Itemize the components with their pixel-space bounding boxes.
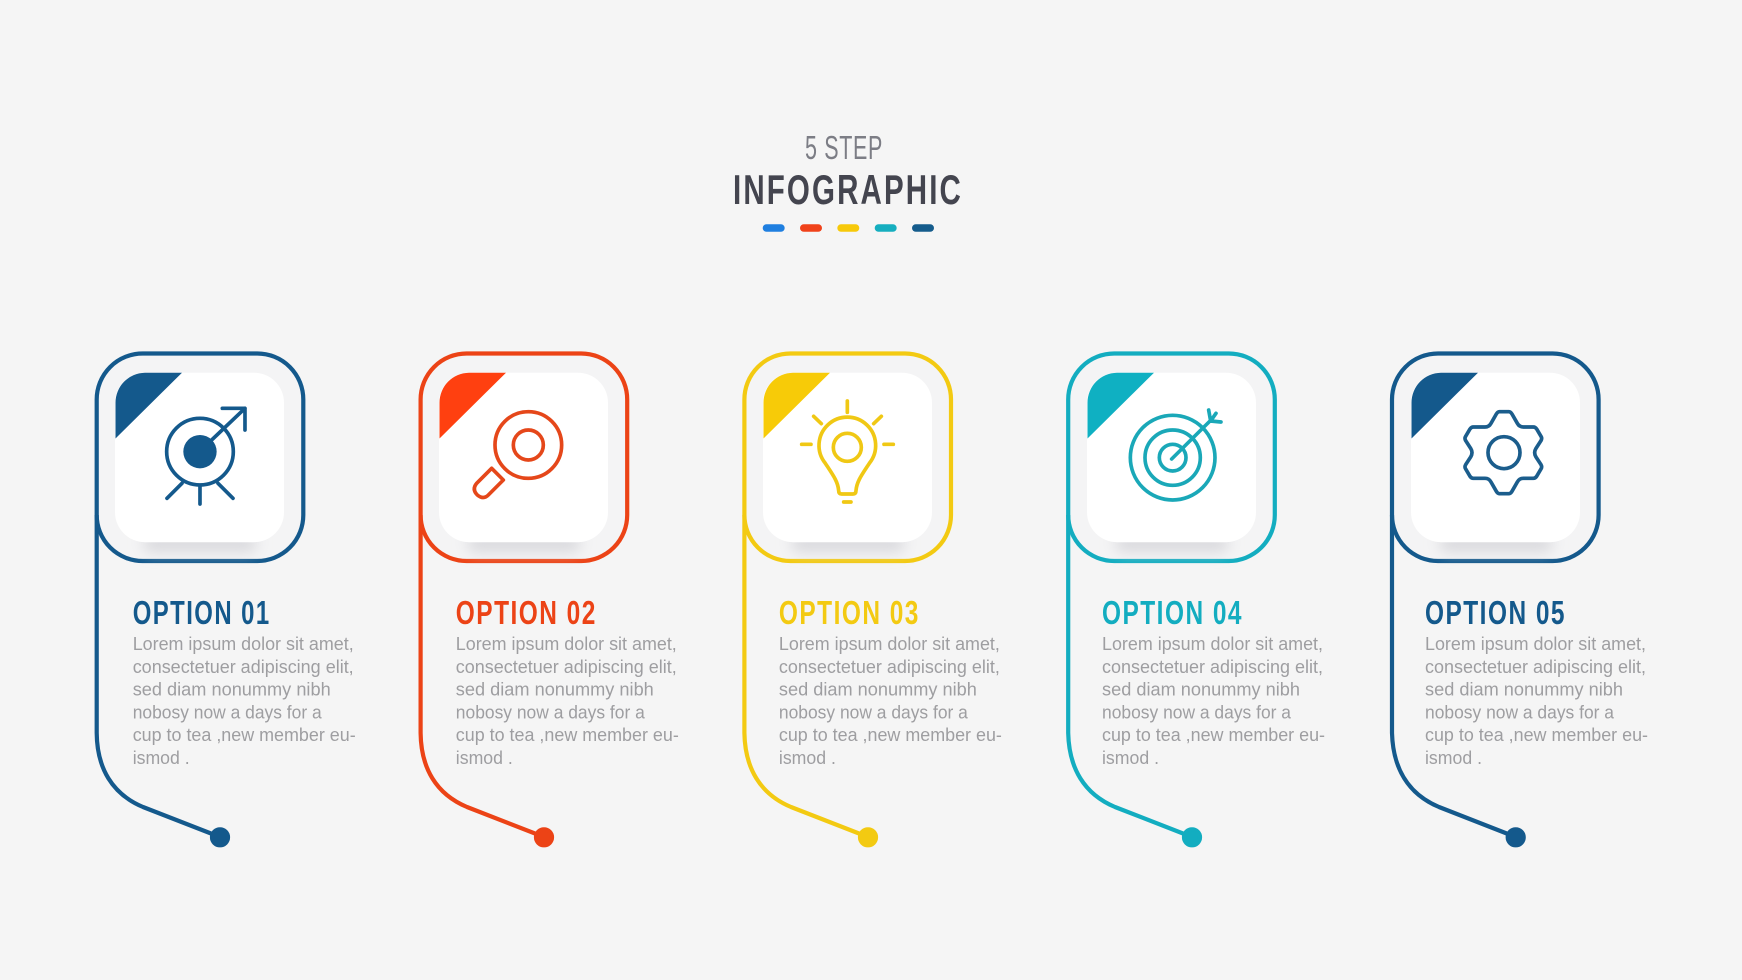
body text: Lorem ipsum dolor sit amet, xyxy=(133,633,354,654)
title xyxy=(733,129,963,232)
body text: nobosy now a days for a xyxy=(133,701,322,722)
corner tab xyxy=(116,373,182,438)
body text: ismod . xyxy=(1102,747,1159,768)
body text: consectetuer adipiscing elit, xyxy=(133,656,354,677)
body text: cup to tea ,new member eu- xyxy=(779,724,1002,745)
frame and tail xyxy=(421,354,627,845)
body text: Lorem ipsum dolor sit amet, xyxy=(1425,633,1646,654)
white card xyxy=(763,373,932,542)
heading: OPTION 03 xyxy=(779,594,920,631)
body text: Lorem ipsum dolor sit amet, xyxy=(456,633,677,654)
body text: consectetuer adipiscing elit, xyxy=(1102,656,1323,677)
body text: nobosy now a days for a xyxy=(1425,701,1615,722)
body text: nobosy now a days for a xyxy=(1102,701,1292,722)
white card xyxy=(1087,373,1256,542)
corner tab xyxy=(764,373,830,438)
panel: option 05 xyxy=(1392,354,1648,845)
body text: cup to tea ,new member eu- xyxy=(133,724,356,745)
icon: target with arrow xyxy=(167,408,245,504)
icon: target and dart xyxy=(1130,410,1221,500)
colour dashes xyxy=(763,224,934,232)
body text xyxy=(779,633,1002,768)
panel: option 02 xyxy=(421,354,679,845)
corner tab xyxy=(440,373,506,438)
panel: option 01 xyxy=(97,354,356,845)
body text: cup to tea ,new member eu- xyxy=(1425,724,1648,745)
body text: Lorem ipsum dolor sit amet, xyxy=(1102,633,1323,654)
corner tab xyxy=(1412,373,1478,438)
body text: consectetuer adipiscing elit, xyxy=(456,656,677,677)
body text: sed diam nonummy nibh xyxy=(1425,679,1623,700)
body text: ismod . xyxy=(1425,747,1482,768)
frame and tail xyxy=(744,354,951,845)
icon: gear xyxy=(1465,412,1542,494)
panel: option 04 xyxy=(1068,354,1325,845)
body text: sed diam nonummy nibh xyxy=(1102,679,1300,700)
frame and tail xyxy=(1392,354,1599,845)
heading: OPTION 02 xyxy=(456,594,597,631)
frame and tail xyxy=(97,354,303,845)
card shadow xyxy=(791,534,905,552)
card shadow xyxy=(1115,534,1229,552)
body text: consectetuer adipiscing elit, xyxy=(1425,656,1646,677)
frame and tail xyxy=(1068,354,1275,845)
white card xyxy=(439,373,608,542)
body text xyxy=(1425,633,1648,768)
heading: OPTION 04 xyxy=(1102,594,1243,631)
body text: sed diam nonummy nibh xyxy=(456,679,654,700)
title line: INFOGRAPHIC: INFOGRAPHIC xyxy=(733,166,963,213)
body text: cup to tea ,new member eu- xyxy=(456,724,679,745)
body text: cup to tea ,new member eu- xyxy=(1102,724,1325,745)
panel: option 03 xyxy=(744,354,1002,845)
white card xyxy=(115,373,284,542)
body text xyxy=(1102,633,1325,768)
body text: ismod . xyxy=(456,747,513,768)
card shadow xyxy=(467,534,581,552)
card shadow xyxy=(1439,534,1553,552)
body text: Lorem ipsum dolor sit amet, xyxy=(779,633,1000,654)
body text: nobosy now a days for a xyxy=(779,701,969,722)
white card xyxy=(1411,373,1580,542)
body text xyxy=(133,633,356,768)
icon: light bulb xyxy=(802,401,893,502)
body text: sed diam nonummy nibh xyxy=(779,679,977,700)
body text: sed diam nonummy nibh xyxy=(133,679,331,700)
body text: nobosy now a days for a xyxy=(456,701,645,722)
body text xyxy=(456,633,679,768)
heading: OPTION 01 xyxy=(133,594,271,631)
body text: ismod . xyxy=(133,747,190,768)
icon: magnifier xyxy=(474,412,562,497)
body text: ismod . xyxy=(779,747,836,768)
heading: OPTION 05 xyxy=(1425,594,1566,631)
title line: 5 STEP: 5 STEP xyxy=(805,129,883,166)
corner tab xyxy=(1088,373,1154,438)
card shadow xyxy=(143,534,257,552)
body text: consectetuer adipiscing elit, xyxy=(779,656,1000,677)
